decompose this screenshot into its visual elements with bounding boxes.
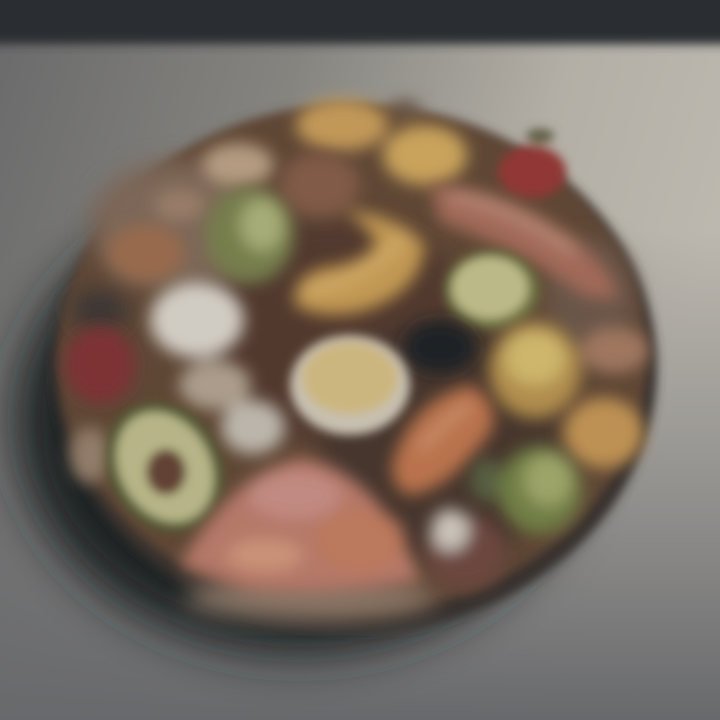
sausage [430,185,618,300]
yellow fruit right [489,322,649,418]
orange right [564,398,644,468]
yellow fruit top [296,99,467,185]
meat centre top [280,153,360,217]
plate shadow [15,185,585,655]
lime half [444,250,540,330]
plate inner textures [72,160,635,620]
green fruit upper left [206,187,294,283]
avocado half [84,381,246,553]
central bowl [290,335,410,435]
nuts top left [70,143,274,483]
raspberry left [65,327,135,403]
cheese and berries bottom right [425,509,505,590]
banana [295,210,425,315]
salmon piece [392,385,494,495]
strawberry top right [498,129,566,198]
salmon ham slices [180,458,420,591]
green apple [471,446,582,534]
dark berries [404,321,476,373]
plate [53,104,657,632]
dark top band [0,0,720,44]
white egg left [150,282,285,454]
food items [65,99,649,620]
